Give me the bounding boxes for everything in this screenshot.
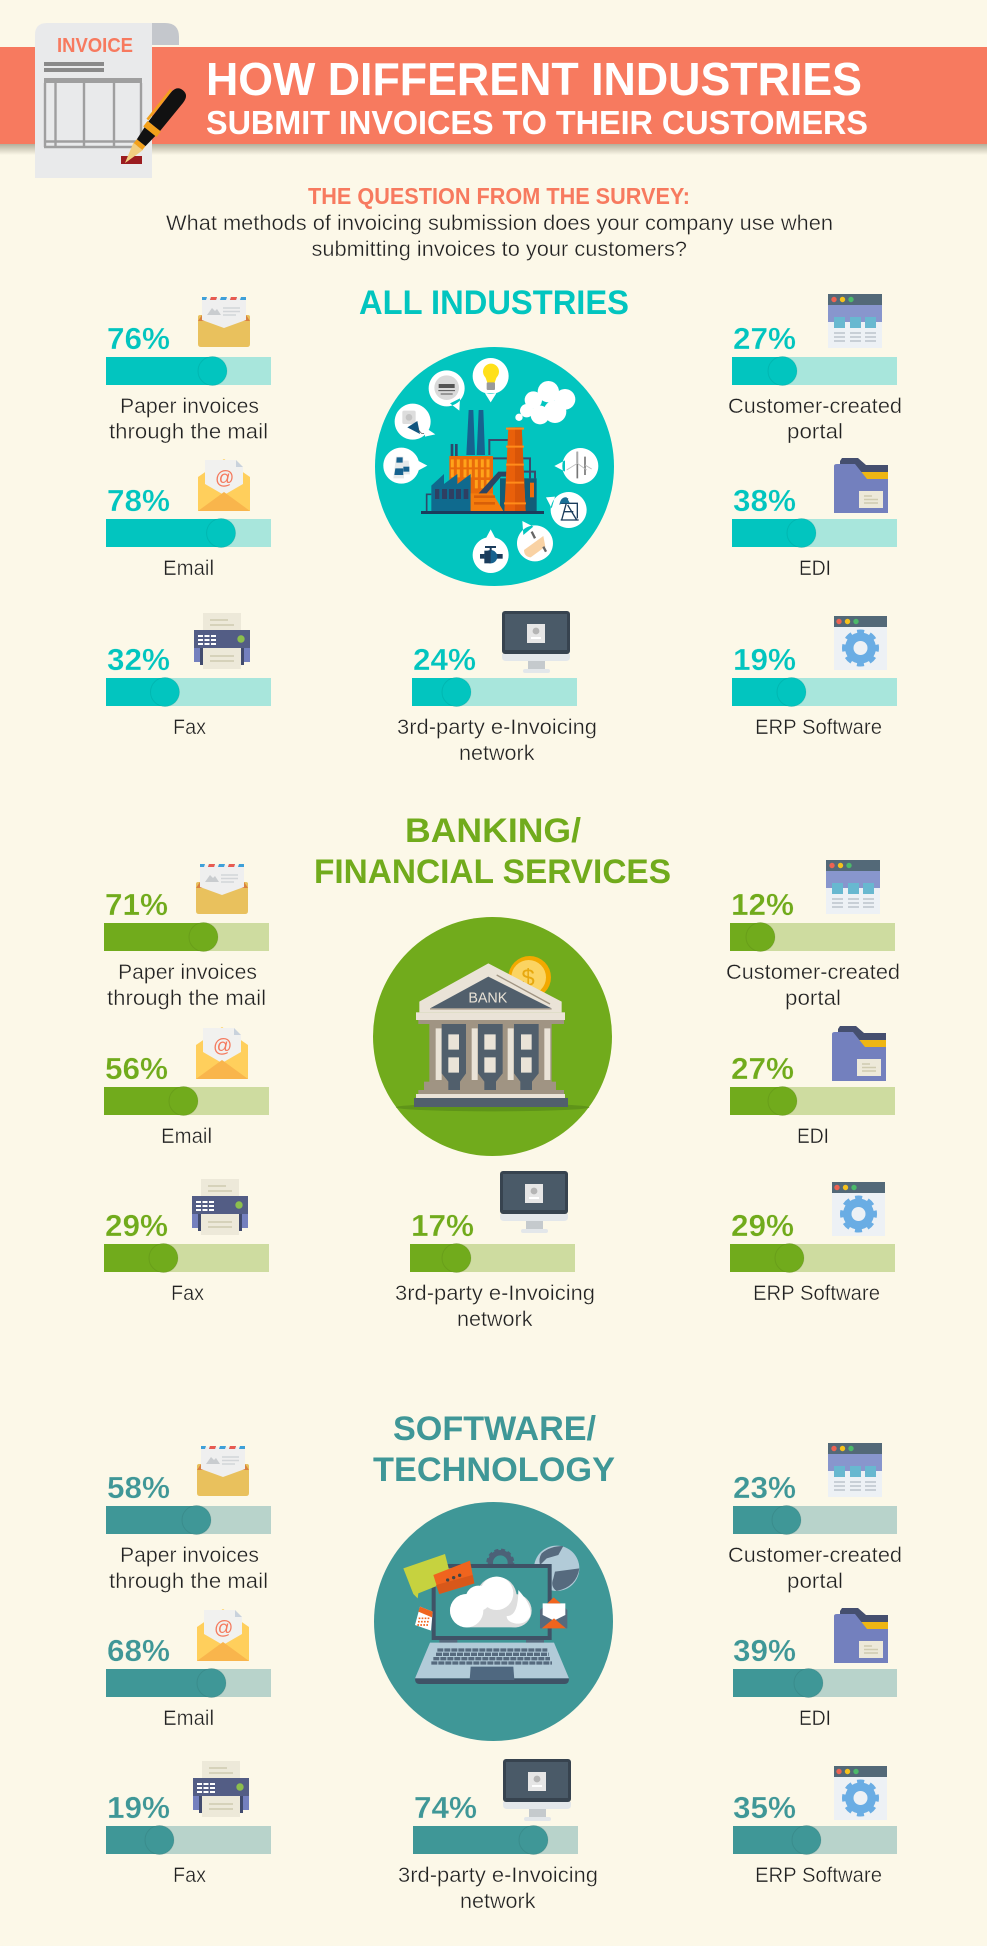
- icon: monitor: [502, 611, 570, 673]
- bar: [106, 356, 271, 386]
- label: [395, 1282, 595, 1331]
- icon: folder: [834, 458, 888, 513]
- icon: folder: [832, 1026, 886, 1081]
- icon: email envelope: [196, 1027, 248, 1079]
- label: [109, 1544, 268, 1593]
- survey question: [166, 183, 833, 261]
- survey question: THE QUESTION FROM THE SURVEY:: [308, 183, 690, 209]
- metric: 3rd-party network 24%: [397, 611, 597, 765]
- bar: [733, 1668, 897, 1698]
- label: network: [457, 1308, 533, 1331]
- bar: [412, 678, 577, 706]
- heading: banking: FINANCIAL SERVICES: [314, 853, 671, 891]
- label: Fax: [173, 1864, 206, 1887]
- value: 78%: [107, 483, 170, 518]
- metric: ERP software 19%: [732, 616, 897, 739]
- label: EDI: [799, 1707, 831, 1730]
- value: 29%: [731, 1208, 794, 1243]
- heading: software: [373, 1410, 615, 1489]
- panel: software / technology: [106, 1410, 902, 1913]
- metric: 3rd-party network 74%: [398, 1759, 598, 1913]
- bar: [732, 678, 897, 706]
- label: network: [460, 1890, 536, 1913]
- illustration: laptop circle: [374, 1502, 613, 1741]
- survey question: What methods of invoicing submission does your company use when: [166, 212, 833, 235]
- label: Fax: [171, 1282, 204, 1305]
- panel: all industries: [106, 284, 902, 765]
- heading: banking: [314, 812, 671, 891]
- metric: fax 19%: [106, 1761, 271, 1887]
- label: portal: [787, 1570, 843, 1593]
- metric: EDI 38%: [732, 458, 897, 580]
- bar: [730, 922, 895, 952]
- label: Email: [161, 1125, 212, 1148]
- label: 3rd-party e-Invoicing: [397, 716, 597, 739]
- illustration: bank circle: $: [521, 965, 535, 992]
- icon: browser portal: [828, 294, 882, 348]
- metric: email 78%: [106, 459, 271, 580]
- label: Email: [163, 1707, 214, 1730]
- label: Customer-created: [728, 395, 902, 418]
- value: 38%: [733, 483, 796, 518]
- bar: [106, 1826, 271, 1854]
- metric: EDI 39%: [733, 1608, 897, 1730]
- title: [206, 53, 868, 141]
- metric: ERP software 35%: [733, 1766, 897, 1887]
- metric: fax 32%: [106, 613, 271, 739]
- metric: ERP software 29%: [730, 1182, 895, 1305]
- label: through the mail: [107, 987, 266, 1010]
- label: ERP Software: [755, 716, 882, 739]
- value: 27%: [733, 321, 796, 356]
- icon: invoice document: INVOICE: [57, 35, 133, 57]
- label: ERP Software: [755, 1864, 882, 1887]
- icon: monitor: [500, 1171, 568, 1233]
- label: Paper invoices: [120, 395, 259, 418]
- label: [728, 1544, 902, 1593]
- label: portal: [787, 420, 843, 444]
- icon: monitor: [503, 1759, 571, 1821]
- icon: fountain pen: [118, 84, 190, 168]
- metric: paper invoices 58%: [106, 1446, 271, 1593]
- icon: email envelope: [197, 1609, 249, 1661]
- label: EDI: [799, 557, 831, 580]
- value: 23%: [733, 1470, 796, 1505]
- illustration: factory circle: [375, 347, 614, 586]
- label: 3rd-party e-Invoicing: [398, 1864, 598, 1887]
- label: [107, 961, 266, 1010]
- heading: software: TECHNOLOGY: [373, 1451, 615, 1489]
- label: network: [459, 742, 535, 765]
- label: through the mail: [109, 1570, 268, 1593]
- value: 74%: [414, 1790, 477, 1825]
- icon: airmail envelope: [197, 1446, 249, 1496]
- value: 56%: [105, 1051, 168, 1086]
- value: 24%: [413, 642, 476, 677]
- label: [726, 961, 900, 1010]
- bar: [732, 356, 897, 386]
- label: Email: [163, 557, 214, 580]
- bar: [106, 678, 271, 706]
- bar: [106, 1668, 271, 1698]
- header banner: [0, 23, 987, 178]
- value: 29%: [105, 1208, 168, 1243]
- value: 35%: [733, 1790, 796, 1825]
- value: 19%: [107, 1790, 170, 1825]
- label: Customer-created: [728, 1544, 902, 1567]
- label: EDI: [797, 1125, 829, 1148]
- metric: customer portal 12%: [726, 860, 900, 1010]
- value: 76%: [107, 321, 170, 356]
- bar: [733, 1506, 897, 1534]
- metric: email 56%: [104, 1027, 269, 1148]
- icon: browser portal: [826, 860, 880, 914]
- icon: settings window: [832, 1182, 885, 1236]
- icon: invoice document: [35, 23, 179, 178]
- title: SUBMIT INVOICES TO THEIR CUSTOMERS: [206, 104, 868, 141]
- value: 68%: [107, 1633, 170, 1668]
- value: 32%: [107, 642, 170, 677]
- bar: [730, 1244, 895, 1272]
- label: [398, 1864, 598, 1913]
- panel: banking / financial services: [104, 812, 900, 1331]
- metric: customer portal 23%: [728, 1443, 902, 1593]
- metric: customer portal 27%: [728, 294, 902, 444]
- survey question: submitting invoices to your customers?: [312, 238, 687, 261]
- label: ERP Software: [753, 1282, 880, 1305]
- heading: all industries: ALL INDUSTRIES: [359, 284, 629, 322]
- label: [728, 395, 902, 444]
- icon: settings window: [834, 616, 887, 670]
- metric: paper invoices 76%: [106, 297, 271, 444]
- value: 58%: [107, 1470, 170, 1505]
- value: 12%: [731, 887, 794, 922]
- label: 3rd-party e-Invoicing: [395, 1282, 595, 1305]
- heading: software: SOFTWARE/: [393, 1410, 597, 1448]
- bar: [730, 1086, 895, 1116]
- illustration: bank circle: BANK: [468, 990, 508, 1006]
- value: 71%: [105, 887, 168, 922]
- label: Customer-created: [726, 961, 900, 984]
- bar: [104, 922, 269, 952]
- value: 39%: [733, 1633, 796, 1668]
- value: 27%: [731, 1051, 794, 1086]
- icon: folder: [834, 1608, 888, 1663]
- bar: [106, 1506, 271, 1534]
- value: 17%: [411, 1208, 474, 1243]
- bar: [106, 518, 271, 548]
- icon: email envelope: [198, 459, 250, 511]
- bar: [104, 1086, 269, 1116]
- metric: fax 29%: [104, 1179, 269, 1305]
- icon: airmail envelope: [196, 864, 248, 914]
- bar: [410, 1244, 575, 1272]
- icon: fax machine: [193, 1761, 249, 1817]
- heading: banking: BANKING/: [405, 812, 582, 850]
- bar: [413, 1826, 578, 1854]
- icon: fax machine: [192, 1179, 248, 1235]
- icon: browser portal: [828, 1443, 882, 1497]
- label: [397, 716, 597, 765]
- icon: settings window: [834, 1766, 887, 1820]
- bar: [733, 1826, 897, 1854]
- metric: 3rd-party network 17%: [395, 1171, 595, 1331]
- illustration: bank circle: [373, 917, 612, 1156]
- bar: [104, 1244, 269, 1272]
- label: Fax: [173, 716, 206, 739]
- title: HOW DIFFERENT INDUSTRIES: [206, 53, 862, 105]
- label: through the mail: [109, 420, 268, 444]
- icon: fax machine: [194, 613, 250, 669]
- label: Paper invoices: [118, 961, 257, 984]
- bar: [732, 518, 897, 548]
- icon: airmail envelope: [198, 297, 250, 347]
- value: 19%: [733, 642, 796, 677]
- metric: EDI 27%: [730, 1026, 895, 1148]
- label: [109, 395, 268, 444]
- metric: paper invoices 71%: [104, 864, 269, 1010]
- metric: email 68%: [106, 1609, 271, 1730]
- label: portal: [785, 987, 841, 1010]
- label: Paper invoices: [120, 1544, 259, 1567]
